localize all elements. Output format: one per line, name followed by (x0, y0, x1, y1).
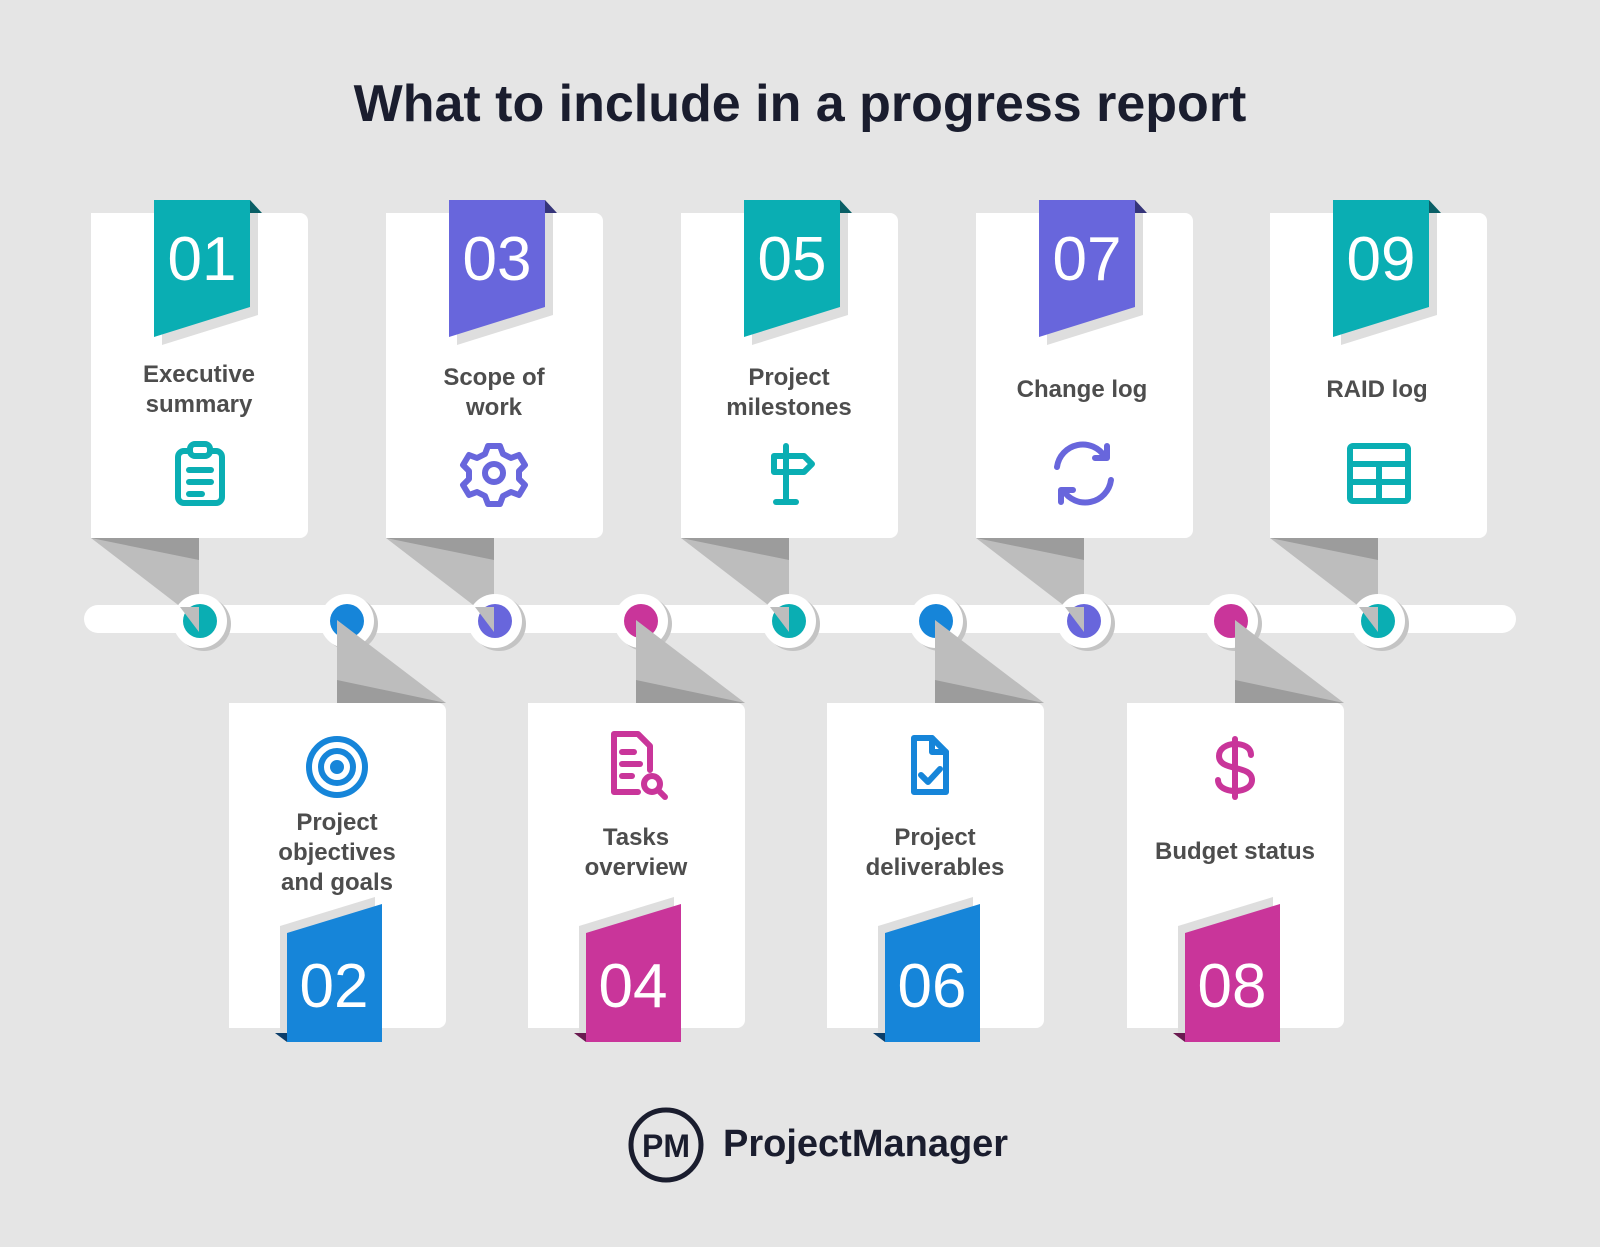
card 08: Budget status: Budget status (1155, 838, 1315, 865)
card 05: Project milestones: milestones (726, 394, 852, 421)
card 04: Tasks overview (528, 703, 745, 1042)
logo: ProjectManager: ProjectManager (723, 1123, 1008, 1165)
card 02: Project objectives and goals: and goals (281, 869, 393, 896)
card 08: Budget status (1127, 703, 1344, 1042)
card 02: Project objectives and goals: objectives (278, 839, 396, 866)
icon: gear (463, 446, 525, 504)
card 02: Project objectives and goals: 02 (300, 952, 368, 1021)
bottom folds (337, 620, 1344, 703)
icon: table (1350, 446, 1408, 501)
icon: document search (614, 734, 665, 797)
card 01: Executive summary: summary (146, 391, 253, 418)
icon: target (309, 739, 365, 795)
icon: signpost (774, 446, 812, 502)
card 07: Change log (976, 200, 1193, 538)
tip points over dots (180, 607, 1378, 632)
card 03: Scope of work (386, 200, 603, 538)
card 09: RAID log: RAID log (1326, 376, 1428, 403)
top folds (91, 538, 1378, 621)
card 02: Project objectives and goals (229, 703, 446, 1042)
card 06: Project deliverables (827, 703, 1044, 1042)
card 04: Tasks overview: overview (585, 854, 688, 881)
icon: refresh (1057, 444, 1111, 503)
card 05: Project milestones (681, 200, 898, 538)
timeline dots (173, 594, 1409, 651)
logo: ProjectManager: PM (642, 1128, 690, 1164)
card 04: Tasks overview: Tasks (603, 824, 669, 851)
title: What to include in a progress report (354, 75, 1246, 133)
card 03: Scope of work: 03 (463, 225, 531, 294)
card 01: Executive summary (91, 200, 308, 538)
card 05: Project milestones: Project (748, 364, 830, 391)
card 03: Scope of work: work (465, 394, 523, 421)
card 07: Change log: 07 (1053, 225, 1121, 294)
card 04: Tasks overview: 04 (599, 952, 667, 1021)
card 06: Project deliverables: deliverables (866, 854, 1004, 881)
card 02: Project objectives and goals: Project (296, 809, 378, 836)
card 06: Project deliverables: 06 (898, 952, 966, 1021)
icon: document check (914, 738, 946, 792)
card 01: Executive summary: 01 (168, 225, 236, 294)
card 09: RAID log: 09 (1347, 225, 1415, 294)
card 05: Project milestones: 05 (758, 225, 826, 294)
card 03: Scope of work: Scope of (443, 364, 546, 391)
logo: ProjectManager (631, 1110, 1008, 1180)
icon: dollar (1218, 739, 1252, 797)
card 08: Budget status: 08 (1198, 952, 1266, 1021)
card 07: Change log: Change log (1017, 376, 1147, 403)
icon: clipboard (178, 444, 222, 503)
card 01: Executive summary: Executive (143, 361, 255, 388)
card 06: Project deliverables: Project (894, 824, 976, 851)
timeline bar (84, 605, 1516, 633)
card 09: RAID log (1270, 200, 1487, 538)
